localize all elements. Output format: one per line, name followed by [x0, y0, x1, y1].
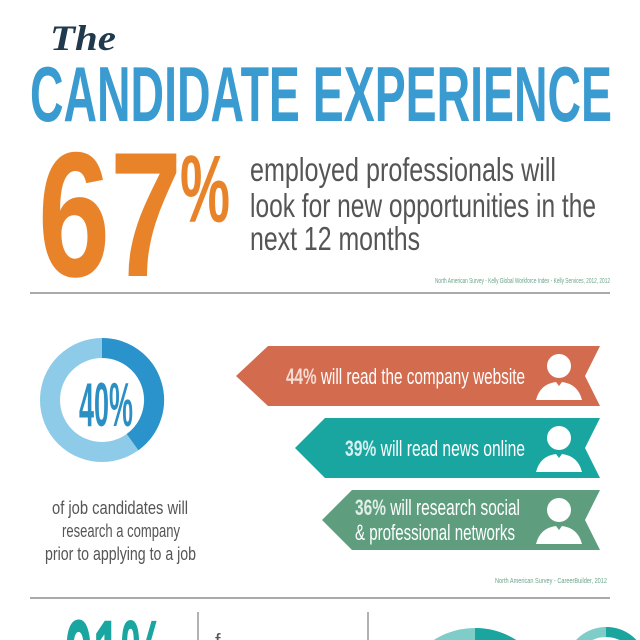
- source 2: North American Survey - CareerBuilder, 2012: [495, 578, 607, 585]
- caption: 40%: [45, 498, 196, 564]
- banner: 39% news online: 39% will read news online: [345, 436, 525, 461]
- banner: 36% social networks: 36% will research social: [355, 495, 520, 520]
- donut chart bottom: [409, 632, 640, 640]
- stat: 67%: %: [180, 136, 230, 243]
- banner: 39% news online: [295, 418, 600, 478]
- banner: 36% social networks: [322, 490, 600, 550]
- banner: 44% company website: [236, 346, 600, 406]
- donut chart: 40%: 40%: [79, 371, 133, 440]
- banner: 44% company website: 44% will read the company website: [286, 364, 525, 389]
- text: 67% description: [250, 151, 596, 257]
- caption: 40%: research a company: [62, 521, 180, 541]
- caption: 40%: prior to applying to a job: [45, 544, 196, 564]
- title: The: The: [50, 18, 116, 58]
- banner: 36% social networks: & professional networks: [355, 520, 515, 545]
- text: 67% description: next 12 months: [250, 220, 420, 257]
- donut chart: 40%: [50, 348, 154, 452]
- text: 67% description: employed professionals will: [250, 151, 556, 188]
- stat: 67%: 67: [38, 115, 182, 314]
- caption: 40%: of job candidates will: [52, 498, 188, 518]
